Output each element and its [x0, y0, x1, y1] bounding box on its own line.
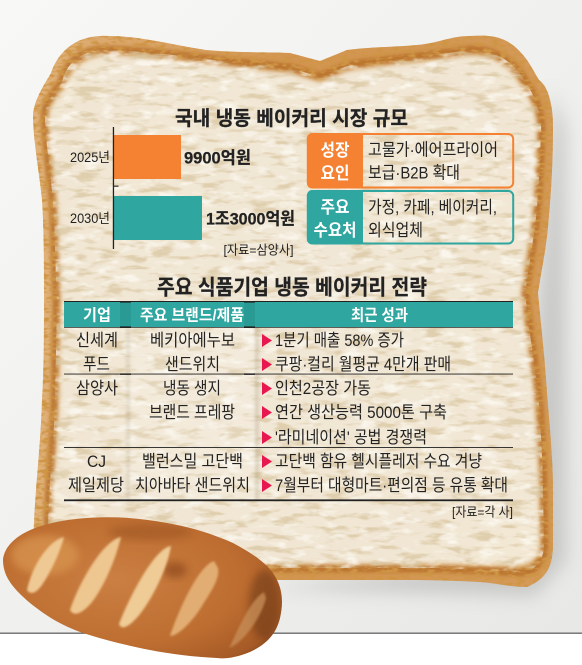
- loaf of bread: [3, 517, 282, 658]
- row: CJ CheilJedang: [68, 452, 508, 495]
- callout: main demand: [307, 190, 513, 244]
- row: CJ CheilJedang: CJ: [87, 452, 106, 471]
- row: Samyang: 인천2공장 가동: [275, 379, 371, 398]
- row: CJ CheilJedang: 밸런스밀 고단백: [142, 452, 243, 471]
- row: Shinsegae Food: 베키아에누보: [150, 331, 235, 350]
- row: Shinsegae Food: 쿠팡·컬리 월평균 4만개 판매: [275, 355, 451, 374]
- table header: 기업: [83, 306, 111, 324]
- bar: 2025: [114, 135, 181, 179]
- row: Shinsegae Food: 1분기 매출 58% 증가: [275, 331, 404, 350]
- callout: growth factors: 보급·B2B 확대: [368, 164, 460, 182]
- callout: main demand: 주요: [320, 198, 350, 217]
- row: Shinsegae Food: 푸드: [83, 355, 110, 374]
- row: Samyang: 연간 생산능력 5000톤 구축: [275, 403, 447, 422]
- label: 2025 year: 2025년: [70, 150, 110, 165]
- table header: [64, 301, 513, 328]
- row: CJ CheilJedang: 치아바타 샌드위치: [135, 476, 250, 495]
- source: each company: [자료=각 사]: [452, 504, 513, 520]
- callout: growth factors: 성장: [320, 141, 350, 160]
- row: Shinsegae Food: [76, 331, 451, 374]
- row: CJ CheilJedang: 고단백 함유 헬시플레저 수요 겨냥: [275, 452, 482, 471]
- callout: main demand: 외식업체: [368, 221, 423, 240]
- bar: 2030: [114, 196, 202, 240]
- heading: market size: 국내 냉동 베이커리 시장 규모: [175, 107, 408, 130]
- row: Samyang: 냉동 생지: [163, 379, 221, 398]
- bread slice: [25, 30, 560, 590]
- callout: growth factors: 고물가·에어프라이어: [368, 140, 498, 160]
- row: CJ CheilJedang: 제일제당: [68, 476, 124, 495]
- row: Samyang: [76, 379, 447, 447]
- bar chart: market size: [70, 127, 295, 249]
- callout: growth factors: 요인: [320, 164, 350, 183]
- callout: growth factors: [307, 133, 513, 188]
- strategy table: [64, 301, 513, 501]
- row: Samyang: 삼양사: [76, 379, 118, 398]
- callout: main demand: 수요처: [314, 221, 356, 240]
- row: Shinsegae Food: 샌드위치: [165, 355, 220, 374]
- value: 2030: 1조3000억원: [206, 210, 295, 228]
- callout: main demand: 가정, 카페, 베이커리,: [368, 198, 497, 217]
- heading: strategy: 주요 식품기업 냉동 베이커리 전략: [157, 276, 427, 300]
- row: Shinsegae Food: 신세계: [76, 331, 118, 350]
- row: Samyang: '라미네이션' 공법 경쟁력: [275, 428, 427, 447]
- row: CJ CheilJedang: 7월부터 대형마트·편의점 등 유통 확대: [275, 476, 508, 495]
- table header: 최근 성과: [351, 306, 408, 324]
- table header: 주요 브랜드/제품: [140, 306, 244, 324]
- value: 2025: 9900억원: [184, 148, 251, 168]
- source: Samyang: [자료=삼양사]: [224, 242, 294, 258]
- label: 2030 year: 2030년: [70, 211, 110, 226]
- row: Samyang: 브랜드 프레팡: [149, 403, 235, 422]
